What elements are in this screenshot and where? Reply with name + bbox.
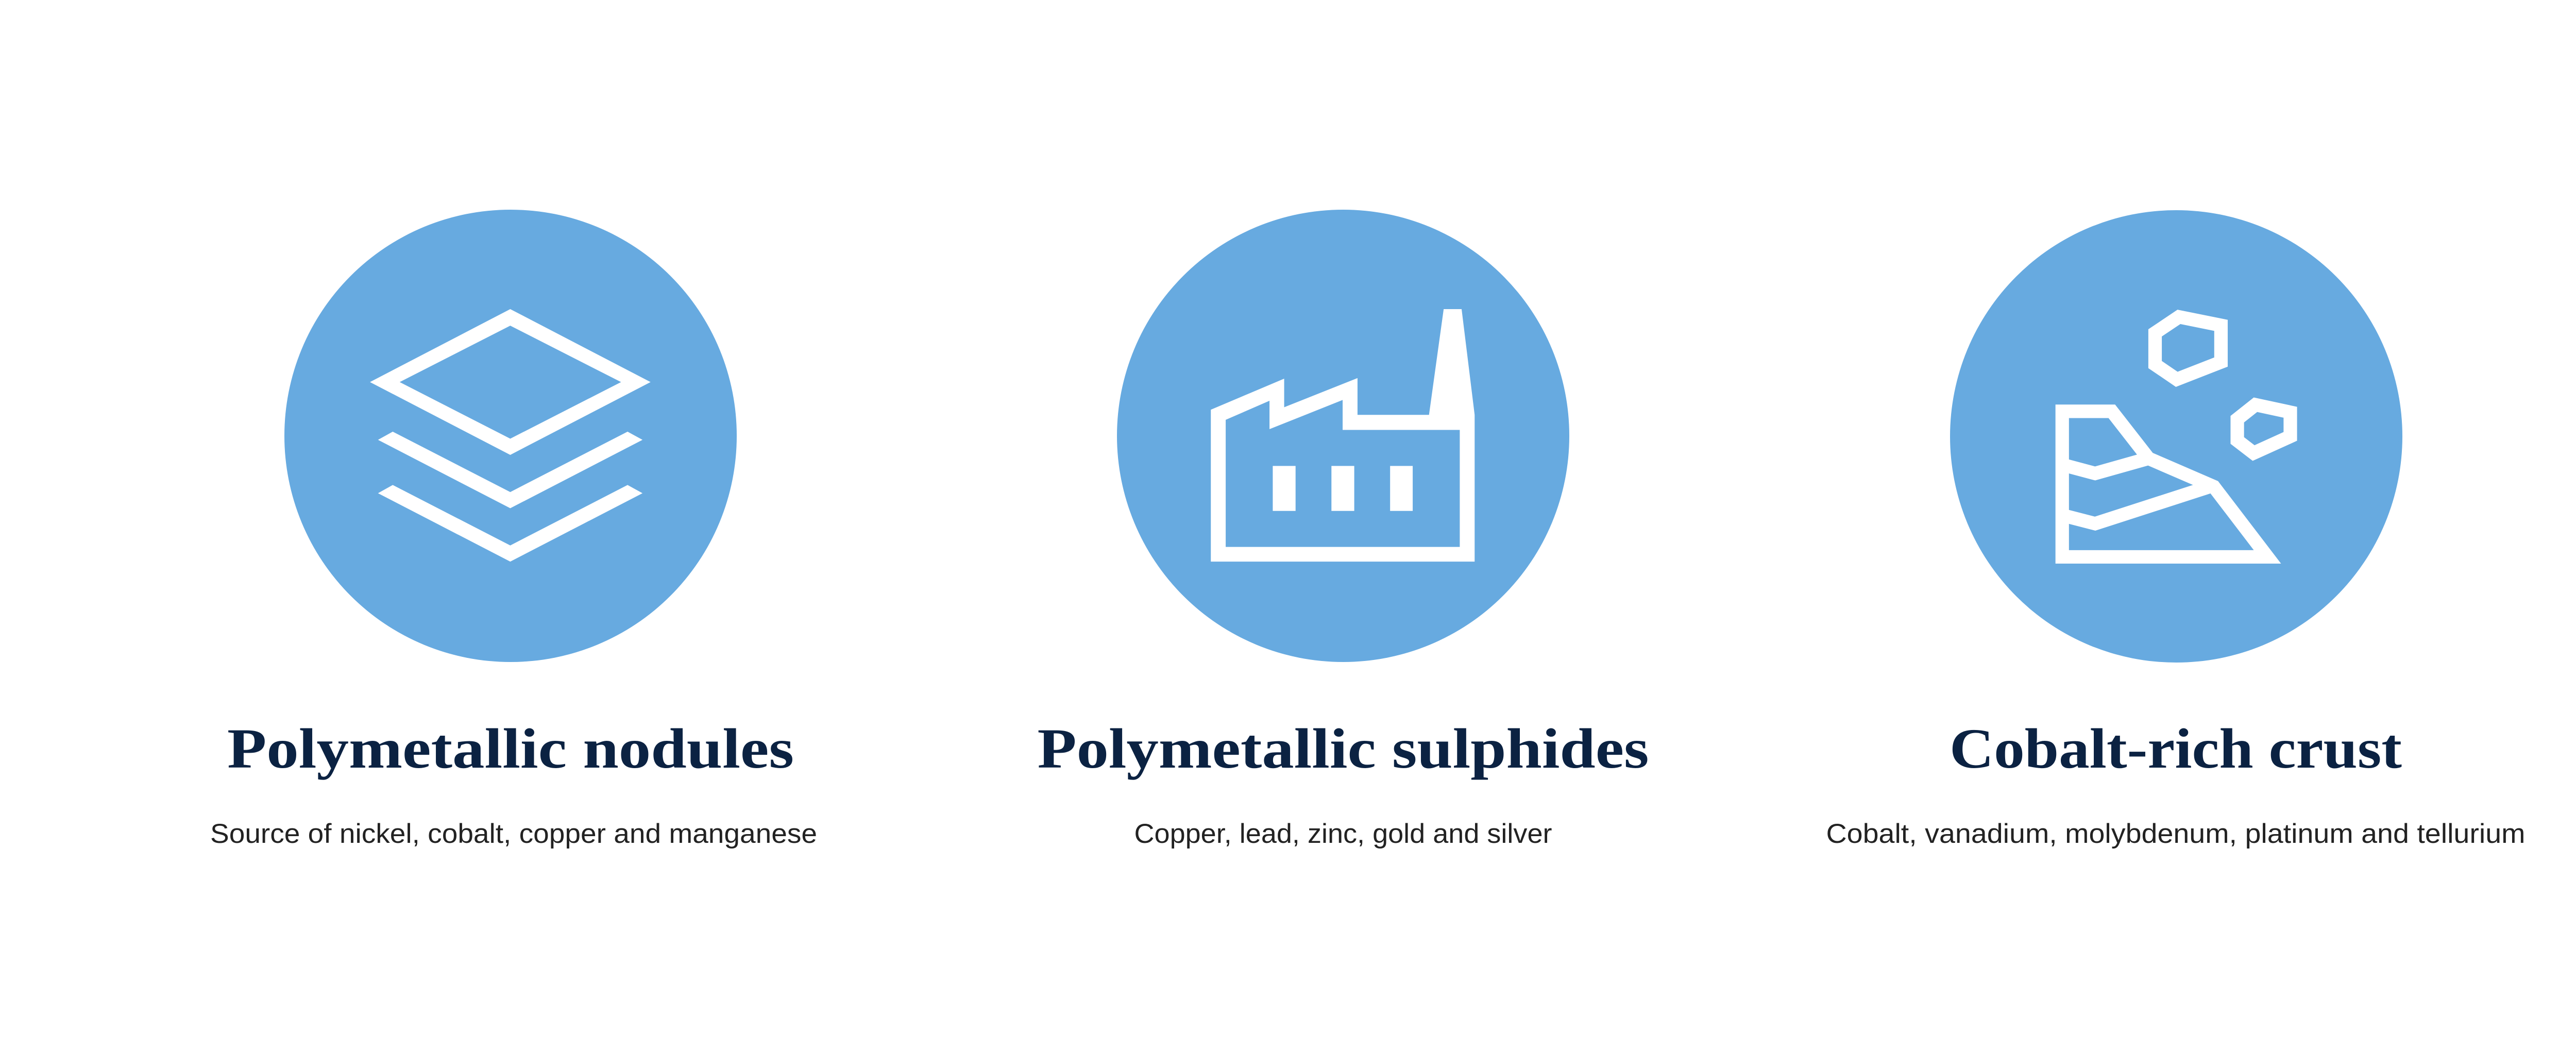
panel: polymetallic nodules xyxy=(210,210,817,849)
subtitle: sulphides: Copper, lead, zinc, gold and silver xyxy=(1134,819,1552,849)
icon: layers xyxy=(370,309,651,562)
circle: nodules xyxy=(284,210,737,662)
circle: sulphides xyxy=(1117,210,1569,662)
title: Polymetallic nodules: Polymetallic nodules xyxy=(227,717,794,780)
subtitle: crust: Cobalt, vanadium, molybdenum, platinum and tellurium xyxy=(1826,819,2526,849)
icon: factory xyxy=(1211,309,1475,562)
title: Polymetallic sulphides: Polymetallic sulphides xyxy=(1038,717,1649,780)
panel: polymetallic sulphides xyxy=(1038,210,1649,849)
icon: crust and rocks xyxy=(2062,317,2290,557)
circle: crust xyxy=(1950,210,2402,663)
panel: cobalt-rich crust xyxy=(1826,210,2526,849)
subtitle: nodules: Source of nickel, cobalt, copper and manganese xyxy=(210,819,817,849)
title: Cobalt-rich crust: Cobalt-rich crust xyxy=(1950,717,2402,780)
